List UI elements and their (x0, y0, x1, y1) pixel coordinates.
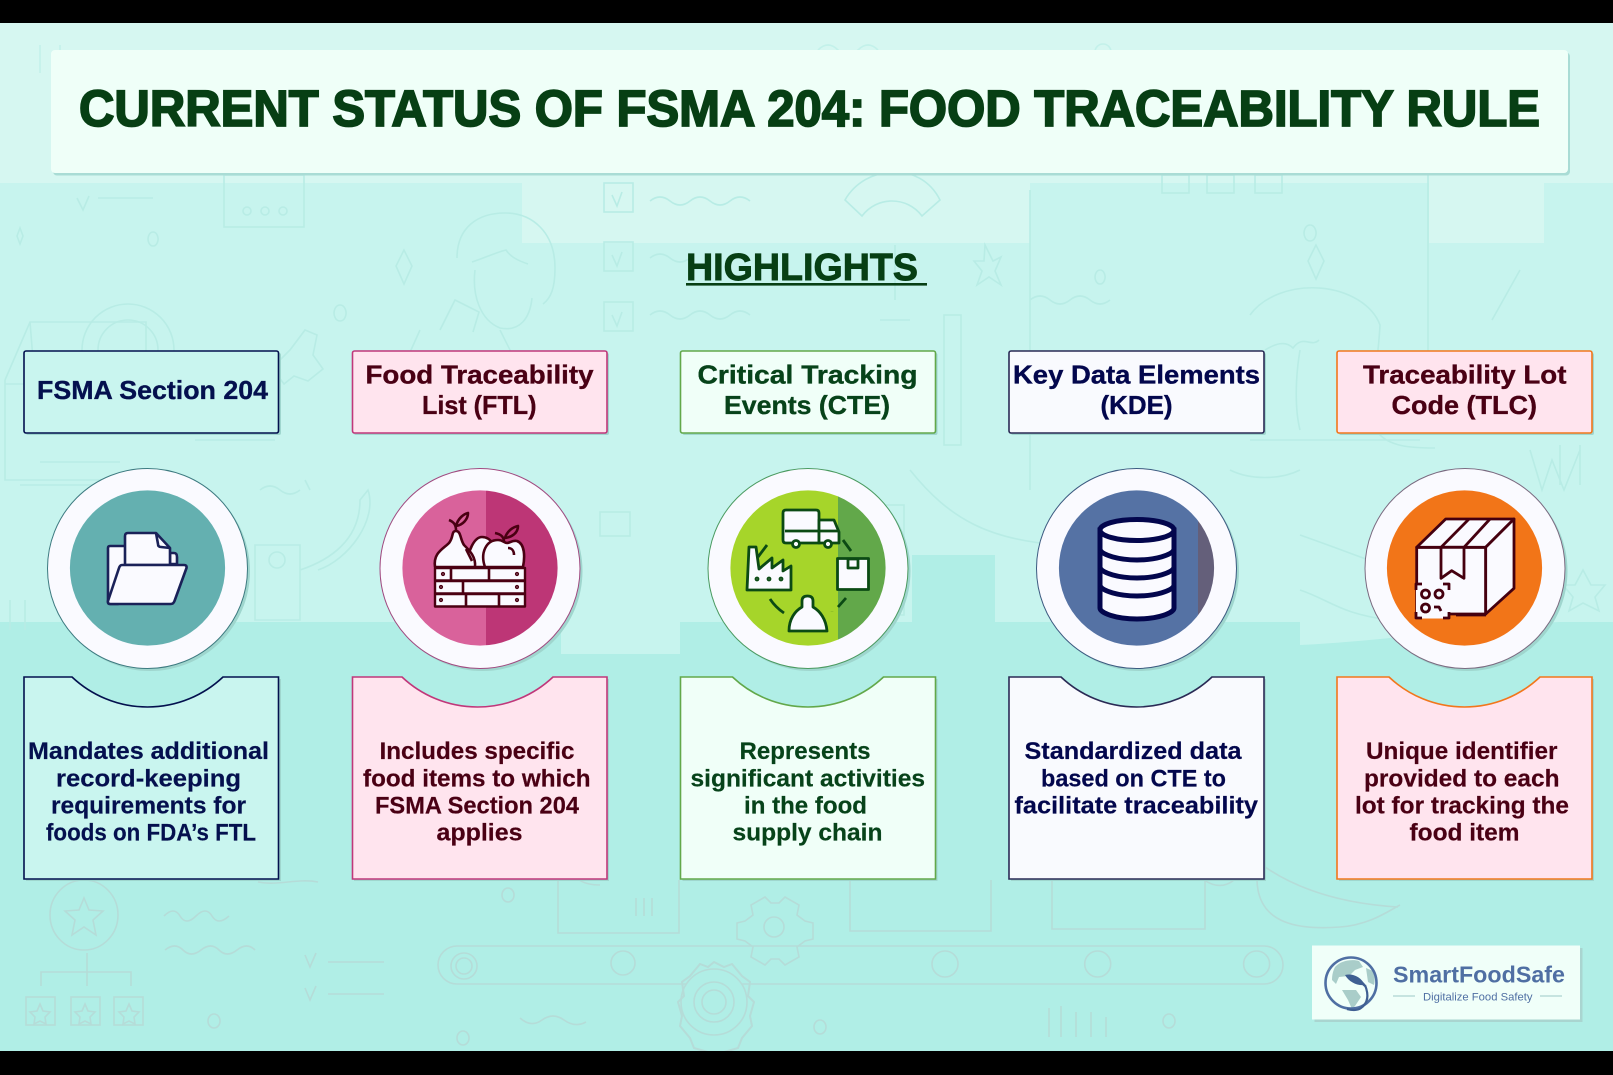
logo: SmartFoodSafe (1312, 946, 1582, 1022)
description: foods on FDA’s FTL (46, 820, 256, 846)
label box: FSMA Section 204 (37, 375, 269, 405)
description: facilitate traceability (1014, 792, 1259, 820)
brand name: SmartFoodSafe (1393, 962, 1565, 988)
label box: Traceability Lot (1363, 360, 1567, 390)
description: Mandates additional (28, 738, 269, 765)
icon circle: package with QR code (1365, 468, 1568, 671)
label box (680, 351, 938, 435)
icon circle: fruit crate (380, 468, 582, 671)
description: food item (1410, 820, 1520, 846)
description (24, 677, 281, 881)
description (1337, 677, 1594, 881)
label box: (KDE) (1100, 390, 1172, 420)
label box: Food Traceability (366, 360, 594, 390)
label box (1337, 351, 1594, 435)
icon circle: supply chain (708, 468, 910, 671)
description: food items to which (363, 766, 590, 792)
description: Standardized data (1024, 738, 1242, 765)
label box: Critical Tracking (698, 360, 918, 390)
description (1009, 677, 1266, 881)
column: Critical Tracking Events (680, 351, 938, 881)
description (352, 677, 609, 881)
icon: globe with leaves (1326, 958, 1376, 1010)
label box (1009, 351, 1266, 435)
label box (24, 351, 281, 435)
column: Traceability Lot Code (1337, 351, 1594, 881)
description: Unique identifier (1366, 738, 1558, 765)
description (680, 677, 938, 881)
description: applies (436, 820, 522, 846)
description: record-keeping (56, 766, 241, 792)
title: CURRENT STATUS OF FSMA 204: FOOD TRACEABILITY RULE (79, 80, 1540, 137)
label box: Events (CTE) (724, 390, 890, 420)
label box (352, 351, 609, 435)
icon circle: folder (48, 468, 250, 671)
label box: List (FTL) (422, 390, 536, 420)
description: provided to each (1364, 766, 1560, 792)
description: based on CTE to (1041, 766, 1226, 792)
description: FSMA Section 204 (375, 792, 580, 820)
column: FSMA Section 204 (24, 351, 281, 881)
description: Represents (740, 738, 870, 765)
description: significant activities (690, 766, 925, 792)
label box: Key Data Elements (1013, 360, 1260, 390)
label box: Code (TLC) (1392, 390, 1537, 420)
column: Food Traceability List (352, 351, 609, 881)
description: requirements for (51, 792, 246, 820)
title panel (51, 50, 1570, 176)
heading: highlights: HIGHLIGHTS (686, 247, 918, 289)
column: Key Data Elements (1009, 351, 1266, 881)
description: supply chain (732, 820, 882, 846)
description: Includes specific (380, 738, 574, 765)
description: in the food (744, 792, 867, 820)
description: lot for tracking the (1355, 792, 1569, 820)
tagline: Digitalize Food Safety (1423, 992, 1533, 1004)
icon circle: database (1036, 468, 1239, 671)
